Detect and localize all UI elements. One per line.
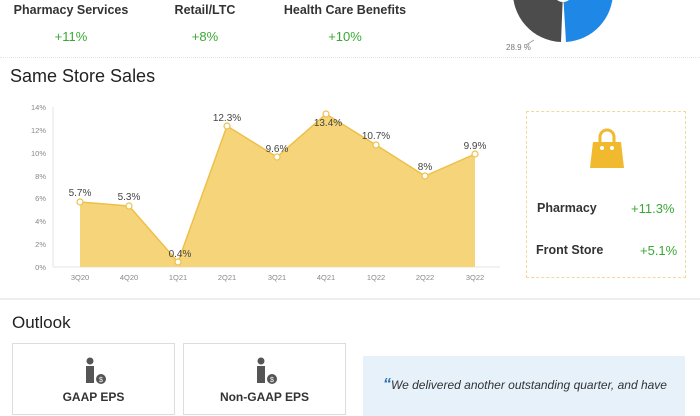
area chart: 5.7% [69, 188, 92, 199]
quote box [363, 356, 685, 416]
heading: same store sales: Same Store Sales [10, 66, 155, 86]
area chart: 10% [31, 149, 46, 158]
area chart: 12.3% [213, 113, 241, 124]
area chart: 2Q22 [416, 273, 434, 282]
metric: retail/ltc: Retail/LTC [175, 3, 235, 17]
area chart: 3Q20 [71, 273, 89, 282]
area chart: 3Q21 [268, 273, 286, 282]
area chart: 12% [31, 126, 46, 135]
icon: person with dollar [257, 358, 277, 384]
area chart: 2% [35, 240, 46, 249]
pie chart [506, 0, 612, 52]
metric: health care benefits: Health Care Benefits [284, 3, 406, 17]
area chart: 2Q21 [218, 273, 236, 282]
area chart: 0% [35, 263, 46, 272]
panel: pharmacy / front store [526, 111, 686, 278]
area chart: 5.3% [118, 192, 141, 203]
panel: pharmacy / front store: Pharmacy [537, 201, 597, 215]
icon: shopping bag [590, 128, 624, 168]
area chart: 6% [35, 194, 46, 203]
metric: retail/ltc: +8% [192, 29, 218, 44]
area chart: 1Q22 [367, 273, 385, 282]
quote box: “We delivered another outstanding quarter, and have [383, 376, 667, 393]
icon: person with dollar: $ [270, 377, 274, 384]
area chart: 4Q21 [317, 273, 335, 282]
metric: pharmacy services [14, 3, 128, 44]
icon: person with dollar: $ [99, 377, 103, 384]
pie chart: 28.9 % [506, 43, 531, 52]
area chart: 1Q21 [169, 273, 187, 282]
metric: health care benefits: +10% [328, 29, 362, 44]
metric: health care benefits [284, 3, 406, 44]
card: gaap eps: GAAP EPS [63, 390, 124, 404]
metric: retail/ltc [175, 3, 235, 44]
panel: pharmacy / front store: +11.3% [631, 201, 674, 216]
metric: pharmacy services: +11% [55, 29, 87, 44]
area chart: 9.6% [266, 144, 289, 155]
panel: pharmacy / front store: Front Store [536, 243, 603, 257]
area chart: 14% [31, 103, 46, 112]
area chart: 8% [418, 162, 432, 173]
area chart: 4% [35, 217, 46, 226]
area chart: 3Q22 [466, 273, 484, 282]
heading: outlook: Outlook [12, 313, 71, 332]
area chart: 0.4% [169, 249, 192, 260]
card: gaap eps [12, 343, 175, 415]
area chart: 13.4% [314, 118, 342, 129]
metric: pharmacy services: Pharmacy Services [14, 3, 128, 17]
card: non-gaap eps: Non-GAAP EPS [220, 390, 309, 404]
area chart: 8% [35, 172, 46, 181]
area chart: 4Q20 [120, 273, 138, 282]
card: non-gaap eps [183, 343, 346, 415]
area chart: 9.9% [464, 141, 487, 152]
area chart: 10.7% [362, 131, 390, 142]
area chart [31, 103, 500, 282]
panel: pharmacy / front store: +5.1% [640, 243, 677, 258]
icon: person with dollar [86, 358, 106, 384]
